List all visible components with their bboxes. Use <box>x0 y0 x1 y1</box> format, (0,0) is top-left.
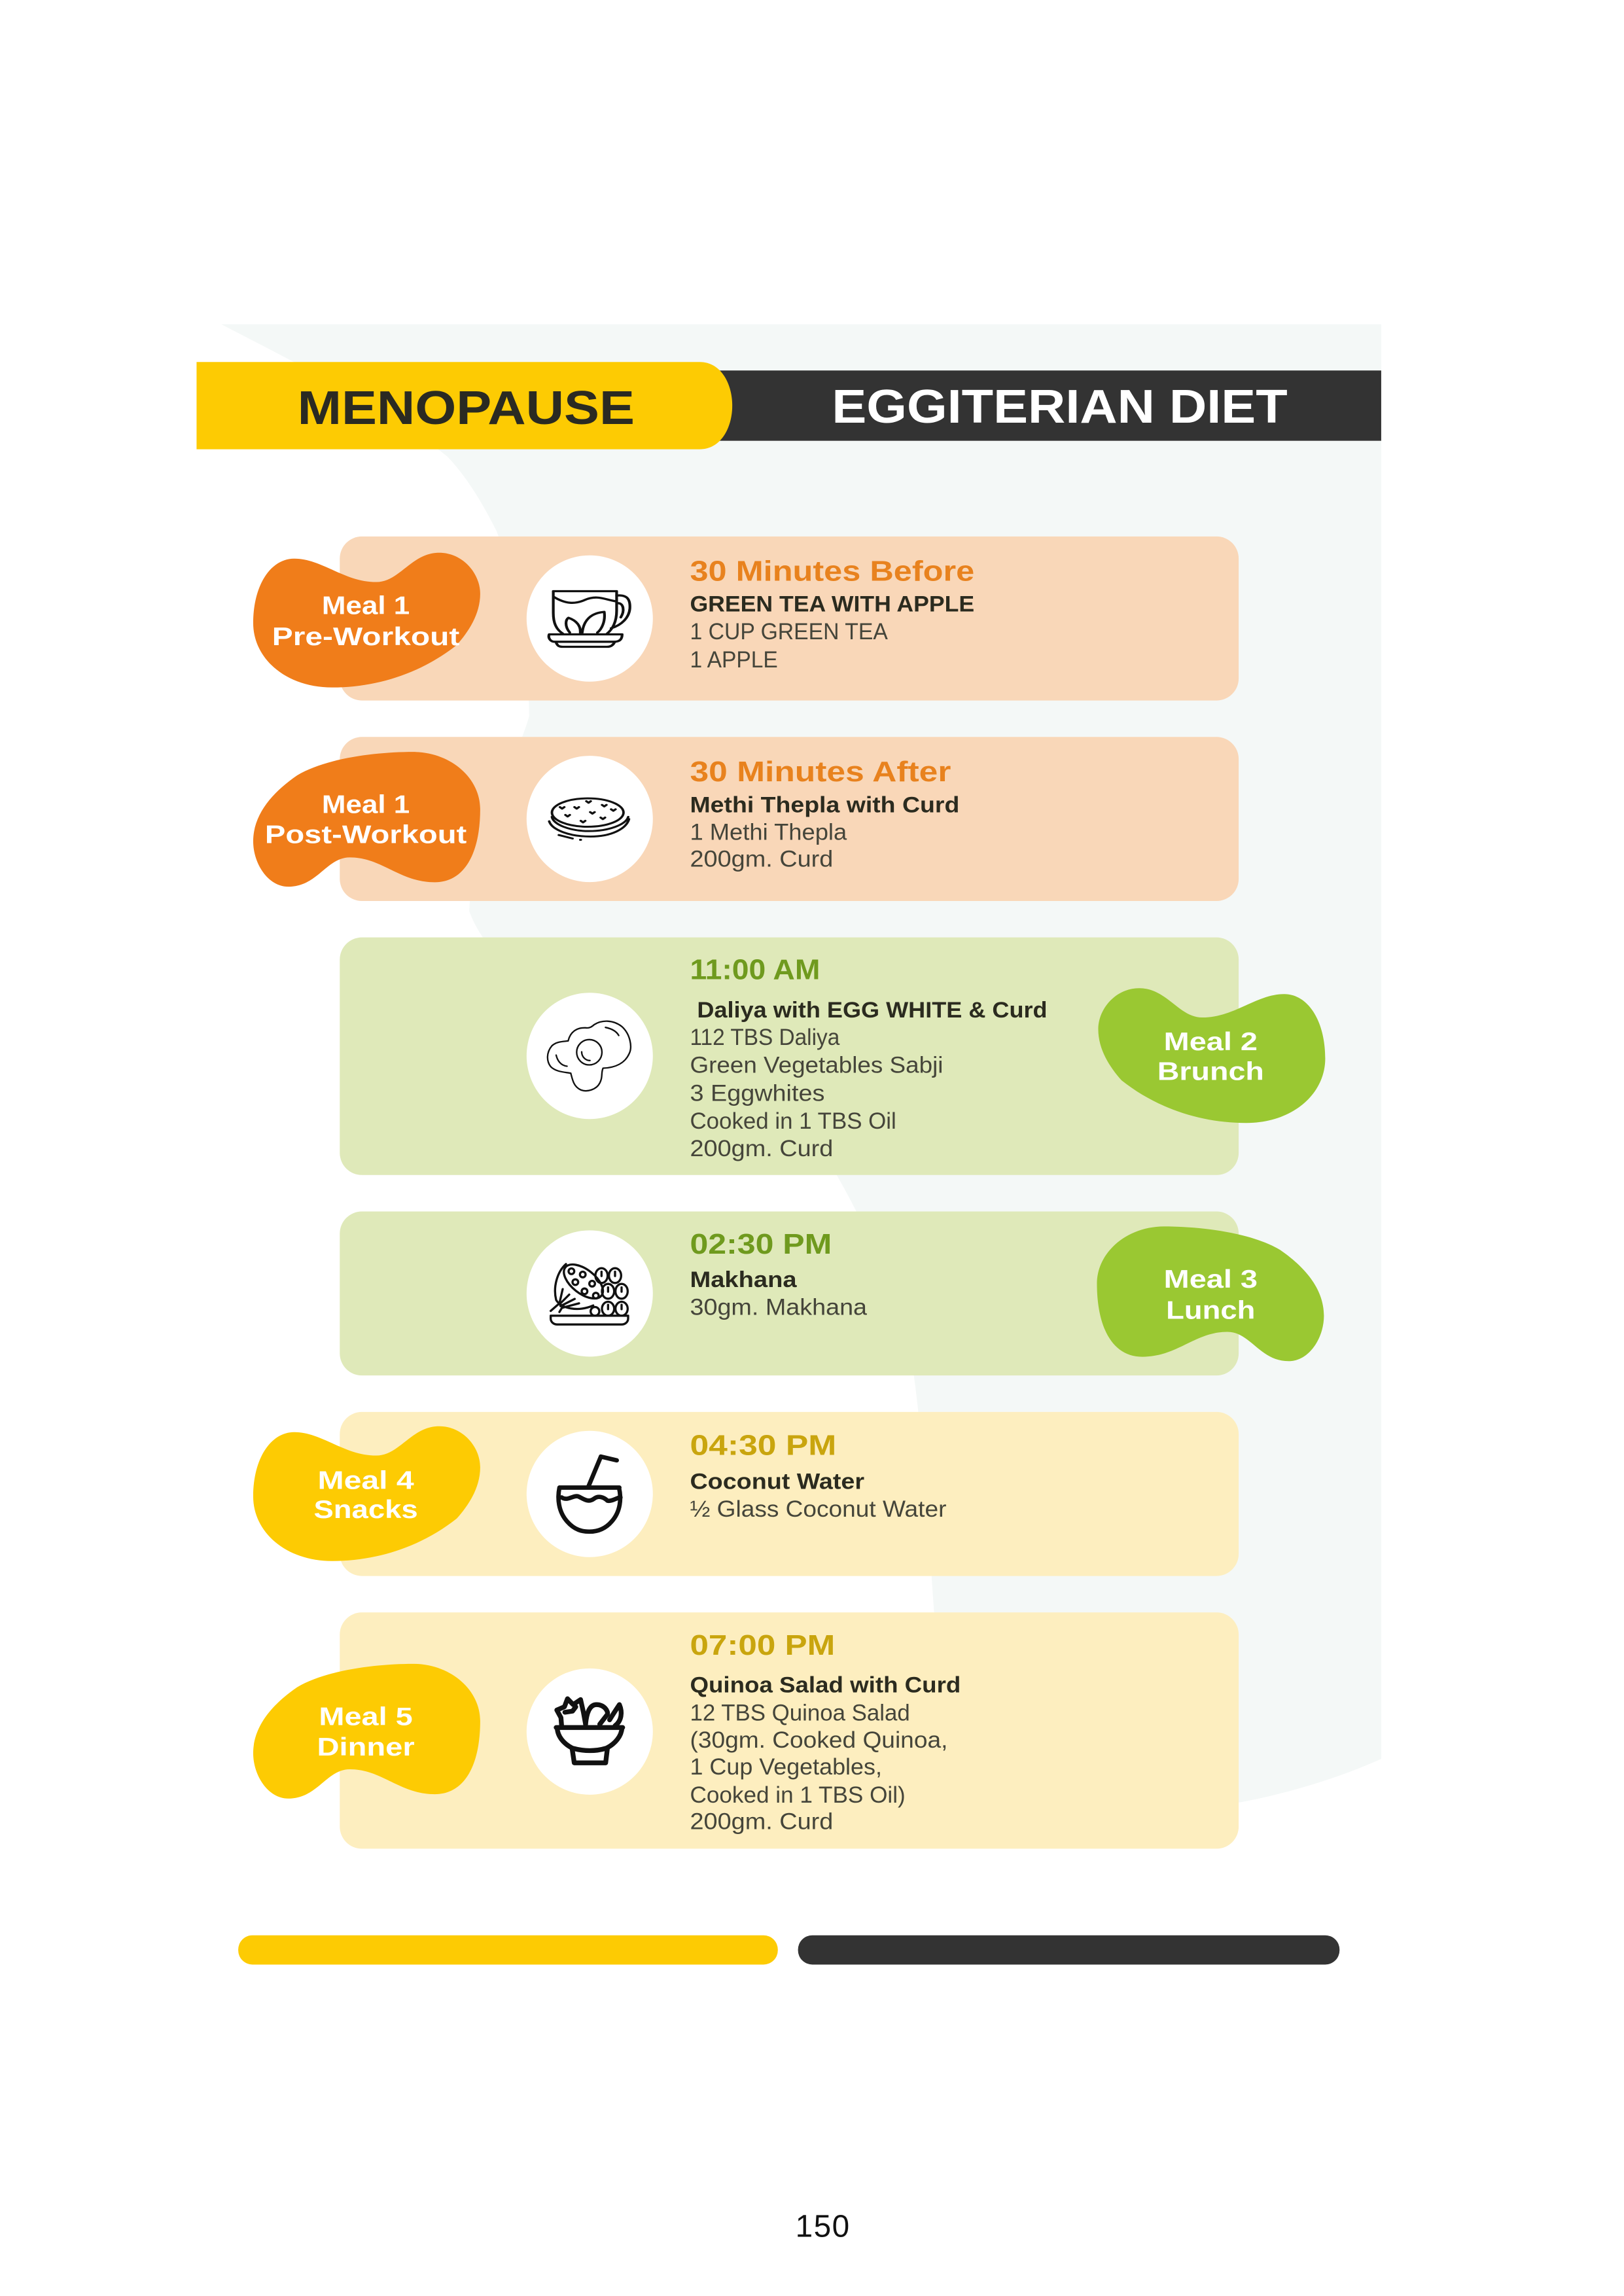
text: meal 5 dinner: 07:00 PM <box>690 1629 835 1661</box>
card background <box>340 1211 1239 1375</box>
text: meal 4 snacks: Coconut Water <box>690 1469 864 1494</box>
text: meal 1 post-workout: 200gm. Curd <box>690 846 833 872</box>
text: meal 4 snacks: 04:30 PM <box>690 1430 836 1462</box>
icon: fried egg <box>527 993 653 1119</box>
text: meal 2 brunch: Cooked in 1 TBS Oil <box>690 1108 896 1134</box>
footer bar: yellow <box>238 1935 778 1964</box>
blob label: meal 3 lunch: Lunch <box>1166 1297 1255 1325</box>
footer bar: dark <box>798 1935 1339 1964</box>
panel: meal 2 brunch <box>340 938 1325 1175</box>
panel: meal 3 lunch <box>340 1211 1324 1375</box>
text: meal 1 post-workout: Methi Thepla with Curd <box>690 793 959 818</box>
yellow banner <box>196 362 732 450</box>
page number: 150 <box>796 2209 849 2244</box>
text: meal 1 pre-workout <box>690 556 974 673</box>
text: meal 3 lunch: Makhana <box>690 1267 798 1292</box>
header: title banner <box>196 362 1381 450</box>
blob label: meal 2 brunch: Brunch <box>1157 1058 1264 1086</box>
blob label: meal 5 dinner <box>253 1664 480 1799</box>
text: meal 3 lunch <box>690 1228 868 1320</box>
panel: meal 1 post-workout <box>253 737 1239 901</box>
text: meal 2 brunch: 200gm. Curd <box>690 1136 833 1161</box>
panel: meal 5 dinner <box>253 1612 1239 1848</box>
text: meal 2 brunch: Daliya with EGG WHITE & Curd <box>697 998 1048 1023</box>
card background <box>340 938 1239 1175</box>
icon: salad bowl <box>527 1669 653 1795</box>
panel: meal 1 pre-workout <box>253 537 1239 701</box>
text: meal 1 pre-workout: 1 APPLE <box>690 647 778 673</box>
blob label: meal 1 post-workout: Meal 1 <box>322 791 410 819</box>
card background <box>340 1412 1239 1576</box>
text: meal 1 post-workout: 1 Methi Thepla <box>690 819 847 845</box>
text: meal 3 lunch: 30gm. Makhana <box>690 1295 868 1320</box>
text: meal 2 brunch: 112 TBS Daliya <box>690 1025 840 1050</box>
card background <box>340 737 1239 901</box>
blob label: meal 4 snacks <box>253 1426 480 1561</box>
blob label: meal 4 snacks: Snacks <box>313 1496 418 1524</box>
text: meal 5 dinner: Quinoa Salad with Curd <box>690 1673 961 1698</box>
text: meal 2 brunch: 3 Eggwhites <box>690 1080 824 1106</box>
text: meal 2 brunch <box>690 953 1048 1161</box>
text: meal 5 dinner: Cooked in 1 TBS Oil) <box>690 1782 906 1808</box>
blob label: meal 3 lunch: Meal 3 <box>1164 1265 1258 1294</box>
icon: thepla <box>527 756 653 882</box>
background shape <box>221 325 1381 1803</box>
blob label: meal 2 brunch <box>1098 988 1325 1123</box>
text: meal 1 post-workout: 30 Minutes After <box>690 756 951 788</box>
text: meal 1 pre-workout: 1 CUP GREEN TEA <box>690 619 889 645</box>
card background <box>340 537 1239 701</box>
blob label: meal 1 pre-workout <box>253 553 480 688</box>
text: meal 4 snacks: ½ Glass Coconut Water <box>690 1496 947 1522</box>
text: meal 5 dinner: (30gm. Cooked Quinoa, <box>690 1727 947 1753</box>
text: meal 1 pre-workout: 30 Minutes Before <box>690 556 974 588</box>
icon: coconut water <box>527 1431 653 1557</box>
text: meal 1 pre-workout: GREEN TEA WITH APPLE <box>690 592 974 616</box>
blob label: meal 4 snacks: Meal 4 <box>317 1466 414 1494</box>
text: meal 5 dinner: 1 Cup Vegetables, <box>690 1754 882 1780</box>
title: menopause: MENOPAUSE <box>298 381 635 434</box>
text: meal 4 snacks <box>690 1430 947 1522</box>
icon: tea cup <box>527 556 653 682</box>
blob label: meal 1 pre-workout: Pre-Workout <box>272 623 459 651</box>
dark banner <box>651 370 1381 441</box>
blob label: meal 1 post-workout <box>253 752 480 887</box>
text: meal 5 dinner: 200gm. Curd <box>690 1809 833 1835</box>
text: meal 3 lunch: 02:30 PM <box>690 1228 832 1260</box>
blob label: meal 1 pre-workout: Meal 1 <box>322 592 410 620</box>
blob label: meal 5 dinner: Dinner <box>317 1733 415 1761</box>
text: meal 5 dinner <box>690 1629 961 1835</box>
panel: meal 4 snacks <box>253 1412 1239 1576</box>
icon: makhana basket <box>527 1230 653 1356</box>
blob label: meal 5 dinner: Meal 5 <box>319 1703 413 1731</box>
card background <box>340 1612 1239 1848</box>
text: meal 1 post-workout <box>690 756 959 872</box>
text: meal 2 brunch: 11:00 AM <box>690 953 820 985</box>
blob label: meal 3 lunch <box>1097 1226 1324 1361</box>
blob label: meal 1 post-workout: Post-Workout <box>265 821 467 849</box>
blob label: meal 2 brunch: Meal 2 <box>1164 1028 1258 1056</box>
title: eggiterian diet: EGGITERIAN DIET <box>832 380 1288 433</box>
text: meal 2 brunch: Green Vegetables Sabji <box>690 1053 943 1078</box>
text: meal 5 dinner: 12 TBS Quinoa Salad <box>690 1700 910 1725</box>
